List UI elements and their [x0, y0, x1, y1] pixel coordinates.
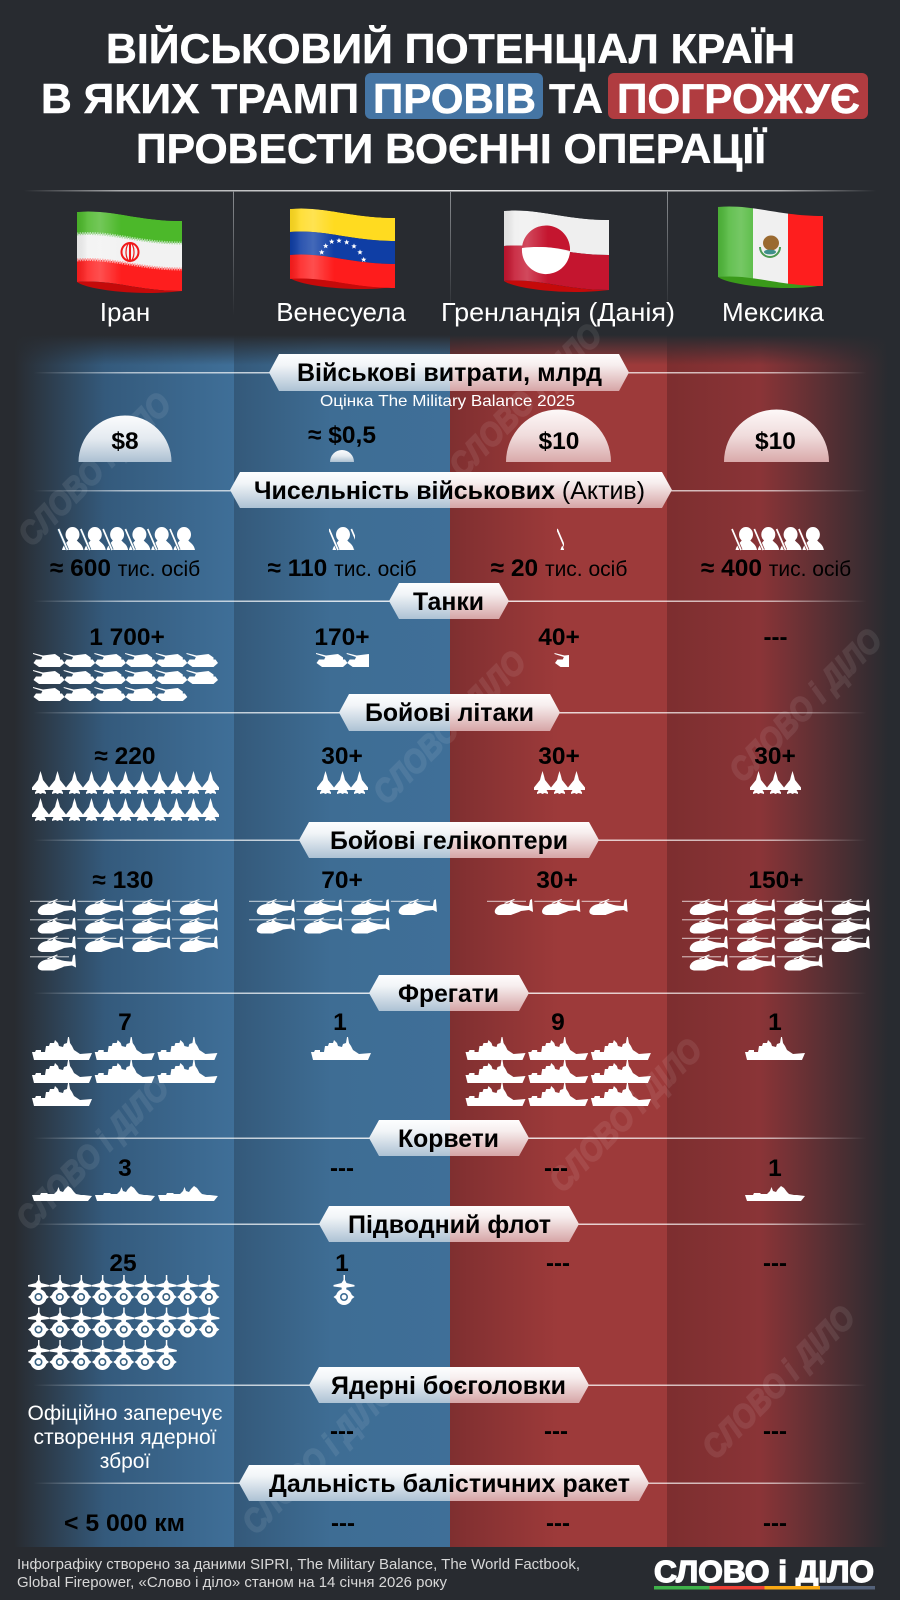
person icons: Iran: [58, 527, 195, 550]
personnel values: ≈ 20 тис. осіб: [491, 555, 627, 582]
tank values: [89, 624, 787, 651]
frigate values: [118, 1009, 782, 1036]
country names: Мексика: [722, 297, 825, 327]
nuclear values: [330, 1418, 787, 1445]
nuclear values: ---: [544, 1418, 568, 1445]
range values: < 5 000 км: [64, 1510, 185, 1537]
watermarks: [8, 316, 889, 1541]
aircraft values: ≈ 220: [94, 743, 156, 770]
tank values: 1 700+: [89, 624, 165, 651]
heading: ballistic missile range: Дальність балістичних ракет: [269, 1470, 630, 1498]
title: ВІЙСЬКОВИЙ ПОТЕНЦІАЛ КРАЇН: [106, 24, 795, 72]
title: В ЯКИХ ТРАМП: [41, 75, 359, 122]
corvette values: 3: [118, 1155, 132, 1182]
helicopter values: 30+: [536, 867, 578, 894]
gauge: Mexico: [724, 410, 829, 462]
tank values: ---: [764, 624, 787, 651]
tank icons: Venezuela: [316, 653, 369, 667]
frigate values: 7: [118, 1009, 132, 1036]
tank values: 170+: [314, 624, 370, 651]
logo: СЛОВО і ДІЛО: [654, 1554, 874, 1589]
range values: ---: [546, 1510, 570, 1537]
corvette icons: Mexico: [745, 1186, 805, 1201]
aircraft icons: Iran: [32, 771, 219, 821]
heading: submarines: Підводний флот: [348, 1211, 551, 1239]
person icons: Greenland: [557, 528, 564, 550]
heading: combat aircraft: Бойові літаки: [365, 699, 534, 727]
watermarks: СЛОВО і ДІЛО: [365, 643, 533, 811]
watermarks: СЛОВО і ДІЛО: [10, 385, 178, 553]
corvette values: ---: [544, 1155, 568, 1182]
heading: military spending: [269, 354, 629, 391]
corvette icons: Iran: [32, 1186, 218, 1201]
submarine values: ---: [546, 1250, 570, 1277]
section: nuclear warheads: [28, 1367, 787, 1473]
heading: tanks: Танки: [413, 588, 484, 616]
gauge: Iran: [78, 416, 172, 462]
aircraft icons: Mexico: [750, 771, 801, 794]
gauge: Venezuela: ≈ $0,5: [308, 422, 376, 449]
footer source text: Інфографіку створено за даними SIPRI, The Military Balance, The World Factbook,: [17, 1556, 580, 1573]
tank icons: Greenland: [554, 653, 569, 667]
frigate values: 1: [333, 1009, 347, 1036]
heading: ballistic missile range: [239, 1465, 649, 1501]
corvette values: ---: [330, 1155, 354, 1182]
helicopter values: ≈ 130: [92, 867, 154, 894]
heading: combat aircraft: [339, 694, 560, 731]
helicopter icons: Iran: [30, 899, 218, 970]
heading: submarines: [319, 1206, 579, 1242]
corvette values: 1: [768, 1155, 782, 1182]
submarine icon: Venezuela: [334, 1275, 354, 1305]
aircraft values: 30+: [754, 743, 796, 770]
submarine values: 25: [109, 1250, 137, 1277]
flag: Mexico: [718, 202, 823, 292]
footer source text: [17, 1556, 580, 1591]
section: submarines: [28, 1206, 787, 1370]
section: combat aircraft: [32, 694, 801, 821]
person icons: Venezuela: [329, 527, 355, 550]
watermarks: СЛОВО і ДІЛО: [234, 1373, 402, 1541]
section: combat helicopters: [30, 822, 870, 970]
title: ПОГРОЖУЄ: [617, 75, 860, 122]
submarine values: ---: [763, 1250, 787, 1277]
gauge: Iran: $8: [111, 428, 139, 455]
nuclear note: Iran: зброї: [100, 1450, 150, 1473]
corvette values: [118, 1155, 782, 1182]
range values: ---: [763, 1510, 787, 1537]
country names: [100, 297, 825, 327]
submarine values: [109, 1250, 787, 1277]
gauge: Greenland: $10: [539, 428, 579, 455]
helicopter icons: Venezuela: [249, 899, 437, 934]
flag: Venezuela: [290, 208, 395, 289]
aircraft values: 30+: [538, 743, 580, 770]
helicopter icons: Mexico: [682, 899, 870, 970]
heading: tanks: [389, 583, 509, 619]
heading: frigates: [369, 975, 529, 1011]
personnel values: ≈ 110 тис. осіб: [268, 555, 416, 582]
panel: coloured country columns: [0, 335, 900, 1547]
title: ПРОВІВ: [373, 75, 536, 122]
nuclear note: Iran: [28, 1402, 223, 1473]
range values: ---: [331, 1510, 355, 1537]
range values: [64, 1510, 787, 1537]
frigate icons: Mexico: [745, 1037, 805, 1060]
flag: Greenland: [504, 206, 609, 296]
nuclear values: ---: [763, 1418, 787, 1445]
aircraft values: [94, 743, 796, 770]
title: ТА: [549, 75, 603, 122]
aircraft icons: Greenland: [534, 771, 585, 794]
frigate values: 1: [768, 1009, 782, 1036]
title: ПРОВЕСТИ ВОЄННІ ОПЕРАЦІЇ: [136, 125, 767, 172]
horizontal section rules: [25, 372, 875, 1484]
heading: nuclear warheads: Ядерні боєголовки: [331, 1372, 566, 1400]
section: personnel: [50, 472, 851, 582]
section: military spending: [78, 354, 829, 462]
watermarks: СЛОВО і ДІЛО: [694, 1298, 862, 1466]
country names: Гренландія (Данія): [441, 297, 675, 327]
section: corvettes: [32, 1120, 805, 1201]
heading: frigates: Фрегати: [398, 980, 499, 1008]
title: [41, 24, 868, 172]
tank values: 40+: [538, 624, 580, 651]
nuclear note: Iran: створення ядерної: [34, 1426, 217, 1449]
nuclear values: ---: [330, 1418, 354, 1445]
tank icons: Iran: [33, 653, 218, 701]
heading: combat helicopters: Бойові гелікоптери: [330, 827, 568, 855]
footer source text: Global Firepower, «Слово і діло» станом на 14 січня 2026 року: [17, 1574, 447, 1591]
personnel values: ≈ 400 тис. осіб: [701, 555, 851, 582]
heading: corvettes: Корвети: [398, 1125, 499, 1153]
aircraft icons: Venezuela: [317, 771, 368, 794]
helicopter values: [92, 867, 804, 894]
aircraft values: 30+: [321, 743, 363, 770]
source note: Оцінка The Military Balance 2025: [320, 393, 575, 410]
submarine values: 1: [335, 1250, 349, 1277]
heading: corvettes: [369, 1120, 529, 1156]
heading: personnel: [230, 472, 672, 508]
frigate values: 9: [551, 1009, 565, 1036]
watermarks: СЛОВО і ДІЛО: [8, 1069, 176, 1237]
flag: Iran: [77, 207, 182, 297]
heading: combat helicopters: [299, 822, 599, 858]
section: frigates: [32, 975, 805, 1106]
frigate icons: Venezuela: [311, 1037, 371, 1060]
submarine icons: Iran: [28, 1275, 219, 1370]
heading: personnel: Чисельність військових (Актив): [254, 477, 645, 505]
personnel values: ≈ 600 тис. осіб: [50, 555, 200, 582]
gauge: Mexico: $10: [755, 428, 796, 455]
person icons: Mexico: [732, 527, 824, 550]
personnel values: [50, 555, 851, 582]
nuclear note: Iran: Офіційно заперечує: [28, 1402, 223, 1425]
frigate icons: Iran: [32, 1037, 217, 1106]
heading: nuclear warheads: [309, 1367, 589, 1403]
gauge: Greenland: [506, 410, 611, 462]
country names: Венесуела: [276, 297, 406, 327]
helicopter icons: Greenland: [487, 899, 628, 915]
country names: Іран: [100, 297, 150, 327]
watermarks: СЛОВО і ДІЛО: [441, 316, 609, 484]
heading: military spending: Військові витрати, млрд: [297, 359, 602, 387]
watermarks: СЛОВО і ДІЛО: [541, 1031, 709, 1199]
section: tanks: [33, 583, 787, 701]
frigate icons: Greenland: [466, 1037, 651, 1106]
section: ballistic missile range: [64, 1465, 787, 1537]
helicopter values: 70+: [321, 867, 363, 894]
helicopter values: 150+: [748, 867, 804, 894]
gauge: Venezuela: [308, 422, 376, 462]
